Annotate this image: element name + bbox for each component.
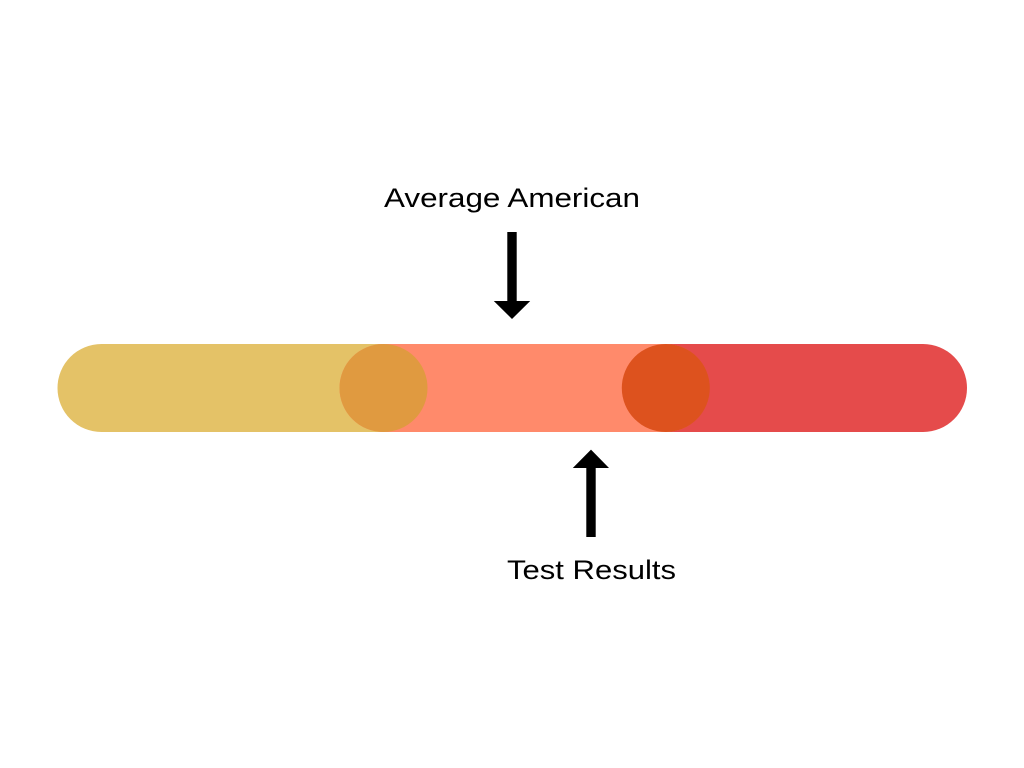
arrow: down to average xyxy=(494,232,530,319)
overlap circle: coral and red xyxy=(622,344,710,432)
label: Test Results: Test Results xyxy=(507,555,676,585)
segment: low (yellow) xyxy=(58,344,428,432)
arrow: up to test results xyxy=(573,450,609,537)
scale bar xyxy=(58,344,967,432)
label: Average American: Average American xyxy=(384,183,640,213)
segment: average (coral) xyxy=(340,344,710,432)
overlap circle: yellow and coral xyxy=(340,344,428,432)
segment: red high xyxy=(622,344,967,432)
